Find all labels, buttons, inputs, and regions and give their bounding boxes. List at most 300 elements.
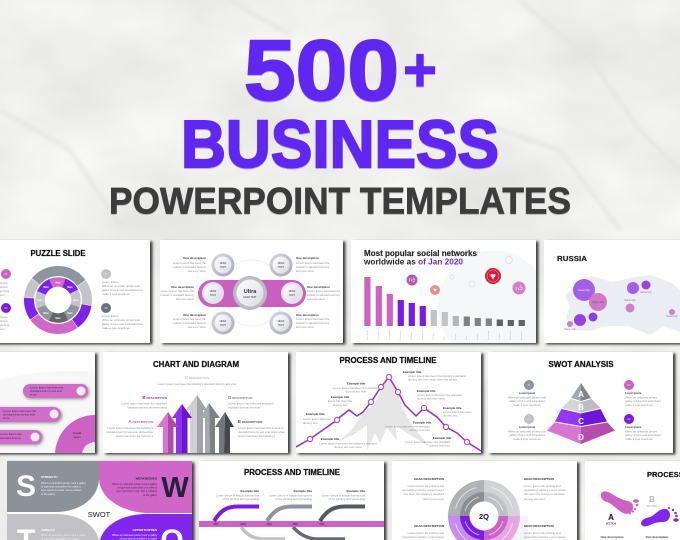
description E: Ipsum has been the industry's <box>238 434 276 438</box>
puzzle ring chart <box>24 266 92 334</box>
description top left: Lorem Ipsum the printing and <box>408 484 444 488</box>
description B: Lorem Ipsum has been the industry's <box>121 402 168 406</box>
mountain silhouette <box>337 377 430 450</box>
example labels <box>216 489 365 501</box>
head text circles: TEXT <box>210 295 217 297</box>
description E: E DESCRIPTION <box>238 419 262 424</box>
example labels: of the printing and typesetting <box>328 497 365 501</box>
description D: Lorem Ipsum has been the industry's <box>228 402 274 406</box>
left labels: text <box>0 327 5 331</box>
description D: D DESCRIPTION <box>228 395 253 400</box>
left items: 02 <box>528 417 531 421</box>
arrow C <box>186 395 207 453</box>
description C <box>158 376 236 386</box>
slide: SWOT analysis pyramid <box>488 352 673 453</box>
slide: pill callouts <box>0 352 100 456</box>
description texts: industry's standard dummy <box>161 293 195 297</box>
description labels: One description <box>601 535 624 539</box>
right items: 04 <box>628 417 631 421</box>
pale curve <box>0 371 95 453</box>
description texts: Lorem Ipsum has been the <box>161 289 194 293</box>
right labels: Lorem Ipsum <box>102 314 119 318</box>
arrow D <box>203 403 220 453</box>
timeline labels: Example title <box>443 406 462 410</box>
timeline labels: Example title <box>347 382 366 386</box>
right items: make a type specimen <box>625 437 653 441</box>
weaknesses text: When an unknown printer took a galley <box>112 482 158 486</box>
description texts: One description <box>307 285 330 289</box>
left items: Lorem Ipsum <box>519 391 536 395</box>
head text circles: HEAD <box>278 262 285 265</box>
timeline labels: Lorem Ipsum has been the standard <box>385 424 430 428</box>
left items: make a type specimen <box>513 403 541 407</box>
slide: social networks bar chart <box>351 240 536 343</box>
right items: When an unknown printer <box>625 430 657 434</box>
left items: Lorem Ipsum <box>519 425 536 429</box>
left labels: simply <box>0 319 9 323</box>
timeline labels: Example title <box>413 420 432 424</box>
description texts: industry's standard dummy <box>307 293 341 297</box>
description D: standard dummy text ever <box>228 406 260 410</box>
pale square <box>484 516 528 540</box>
bar labels: Facebook <box>367 329 369 340</box>
description bottom left: HEAD DESCRIPTION <box>414 524 444 528</box>
callout pill 3: Lorem Ipsum has <box>0 432 22 436</box>
right labels: 03 <box>105 272 108 276</box>
heading: POWERPOINT TEMPLATES: POWERPOINT TEMPLATES <box>109 180 571 222</box>
bubble labels: Name City <box>640 291 652 294</box>
timeline labels: dummy text ever since <box>334 445 362 449</box>
left labels: Ipsum <box>0 281 8 285</box>
opportunities text: OPPORTUNITIES <box>132 528 157 532</box>
description texts: text ever since <box>296 325 314 329</box>
strength text: to the galley <box>41 492 56 496</box>
timeline labels: dummy text ever <box>409 428 430 432</box>
left items: galley of type and scrambled <box>509 433 545 437</box>
icons: social reactions: ♥ <box>490 272 496 282</box>
letter W: W <box>161 472 189 504</box>
curve dark grey <box>293 527 345 539</box>
threats text: When an unknown printer took a galley <box>41 533 87 537</box>
description labels <box>601 535 669 539</box>
left labels: text <box>0 293 5 297</box>
head text circles: TEXT <box>220 267 227 269</box>
callout pill 2 <box>0 407 61 422</box>
timeline band: 2019 <box>266 524 272 526</box>
timeline labels: Lorem Ipsum has been <box>303 417 332 421</box>
head text circles: TEXT <box>289 295 296 297</box>
timeline band: 2021 <box>319 524 325 526</box>
description top right: dummy text ever <box>524 497 545 501</box>
description bottom right <box>524 524 566 539</box>
icon: purple footprint <box>641 507 679 526</box>
callout pill 3: standard dummy <box>0 436 21 440</box>
section A label <box>606 513 616 526</box>
description texts: Lorem Ipsum has been the <box>173 317 206 321</box>
strength text: STRENGTH <box>41 475 58 479</box>
head text circles: HEAD <box>220 262 227 265</box>
head text circles: TEXT <box>220 325 227 327</box>
left items: make a type specimen <box>513 437 541 441</box>
left labels: printing <box>0 323 10 327</box>
slide title: Most popular social networks <box>364 249 478 258</box>
head text circles: HEAD <box>289 290 296 293</box>
callout pill 3 <box>0 430 42 444</box>
centre circle: HEAD TEXT <box>243 296 257 299</box>
threats text: THREATS <box>41 528 55 532</box>
right labels: 04 <box>105 306 108 310</box>
description texts: One description <box>183 313 206 317</box>
puzzle ring chart: Main <box>67 313 73 315</box>
example labels: Lorem Ipsum is simply dummy text <box>269 494 312 498</box>
strength text: type specimen book. Not a problem <box>41 488 82 492</box>
left items: 01 <box>528 383 531 387</box>
timeline labels: Example title <box>306 412 325 416</box>
right labels: galley of type and scrambled it to <box>102 322 143 326</box>
timeline labels: dummy text ever <box>429 444 450 448</box>
quarter circle: Ipsum <box>73 435 81 439</box>
bubble labels: Name City <box>578 289 590 292</box>
callout pill 1 <box>23 384 88 398</box>
puzzle ring chart: Main <box>73 300 79 302</box>
description top left: HEAD DESCRIPTION <box>414 477 444 481</box>
slide: puzzle slide <box>0 240 150 343</box>
puzzle ring chart: Main <box>43 287 49 289</box>
description bottom left <box>402 524 445 539</box>
description texts: Lorem Ipsum has been the <box>307 289 341 293</box>
slide: process and timeline curves <box>199 461 384 540</box>
description top right: has been the industry's standard <box>524 492 565 496</box>
pyramid: B <box>578 403 584 412</box>
bar labels: WhatsApp <box>388 329 391 340</box>
head text circles: HEAD <box>210 290 217 293</box>
description E: standard dummy text ever since when <box>238 430 286 434</box>
description top left: dummy text ever <box>423 497 444 501</box>
strength text <box>41 475 87 496</box>
bubble labels: Name City <box>592 301 604 304</box>
description top right: Lorem Ipsum the printing and <box>524 484 561 488</box>
slide: SWOT colour quadrants <box>7 461 192 540</box>
left items: galley of type and scrambled <box>509 399 545 403</box>
slide: ultra head text diagram <box>160 240 343 343</box>
description texts: industry's standard dummy <box>173 321 207 325</box>
description top left: typesetting industry. Lorem Ipsum <box>402 488 445 492</box>
left labels: Ipsum <box>0 315 8 319</box>
head text circles: TEXT <box>278 267 285 269</box>
description A: Lorem Ipsum has been the industry's <box>107 426 154 430</box>
head text circles: HEAD <box>220 320 227 323</box>
icon: magenta footprint <box>601 491 639 514</box>
left items: When an unknown printer took <box>508 430 547 434</box>
right items: 03 <box>628 383 631 387</box>
left items <box>508 380 547 441</box>
description texts: industry's standard dummy <box>296 321 330 325</box>
description texts: One description <box>296 256 319 260</box>
bar labels: Instagram <box>421 330 424 340</box>
description texts: industry's standard dummy <box>296 265 330 269</box>
right labels: galley of type and scrambled it to <box>102 288 143 292</box>
description labels: Two description <box>646 535 669 539</box>
description B: standard dummy text ever since <box>127 406 167 410</box>
timeline labels: Lorem Ipsum has been <box>443 410 472 414</box>
example labels: Example title <box>346 489 365 493</box>
left labels: printing <box>0 289 10 293</box>
magenta pill <box>198 280 306 307</box>
timeline labels: Ipsum has been the <box>328 399 353 403</box>
description top right <box>524 477 566 501</box>
strength text: of type and scrambled it to make a <box>41 484 81 488</box>
strength text: When an unknown printer took a galley <box>41 481 87 485</box>
timeline labels: Lorem Ipsum has been the industry's standard <box>408 374 466 378</box>
bar labels: Facebook <box>400 329 402 340</box>
description texts <box>161 256 341 329</box>
description texts: text ever since <box>307 297 325 301</box>
timeline labels: dummy text ever <box>346 390 366 394</box>
timeline labels: Lorem Ipsum has been the standard <box>405 440 450 444</box>
timeline labels: Lorem Ipsum has been the industry's standard <box>319 442 377 446</box>
description texts: Lorem Ipsum has been the <box>296 317 330 321</box>
timeline band: 2020 <box>292 524 298 526</box>
bar labels: Pinterest <box>509 331 512 340</box>
section A label: SECTION <box>606 524 616 526</box>
slide subtitle: worldwide as of Jan 2020 <box>363 258 464 266</box>
circular quadrants: 2Q <box>479 512 489 521</box>
timeline labels: dummy text ever since when the printer <box>408 378 457 382</box>
bar labels: Twitter <box>498 333 501 340</box>
timeline labels: dummy text <box>443 414 458 418</box>
quarter circle: Lorem <box>73 431 82 435</box>
description top left <box>402 477 445 501</box>
centre circle <box>233 276 267 310</box>
threats text <box>41 528 87 540</box>
slide: Russia map <box>544 240 680 343</box>
timeline labels: Example title <box>321 437 340 441</box>
bar labels <box>367 329 523 340</box>
description texts: One description <box>183 256 206 260</box>
section B label: SECTION <box>647 506 657 508</box>
icons: social reactions: ♥ <box>433 288 437 294</box>
left labels: 01 <box>5 272 8 276</box>
timeline line <box>296 377 481 451</box>
puzzle ring chart: Main <box>43 313 49 315</box>
slide: process footprints <box>585 461 680 540</box>
curve light grey <box>241 527 285 539</box>
slide title: SWOT ANALYSIS <box>548 360 614 369</box>
quarter circle <box>55 415 95 453</box>
description A <box>106 419 154 438</box>
quadrant O <box>100 514 192 540</box>
description bottom right: Lorem Ipsum the printing and <box>524 531 561 535</box>
bar labels: Reddit <box>476 333 479 340</box>
description bottom left: typesetting industry. Lorem Ipsum <box>402 535 445 539</box>
description texts: Lorem Ipsum has been the <box>173 261 206 265</box>
bar labels: Snapchat <box>487 330 490 340</box>
timeline band: 2018 <box>240 524 246 526</box>
quadrant S <box>7 461 99 512</box>
slide: 2Q circular diagram <box>392 461 577 540</box>
right labels: When an unknown printer took <box>102 284 141 288</box>
bar labels: Sina <box>466 335 468 340</box>
left labels: 02 <box>5 306 8 310</box>
icons: social reactions: 👍︎ <box>515 286 523 292</box>
timeline labels: Example title <box>331 395 350 399</box>
pale background circle <box>437 250 536 343</box>
right items: Lorem Ipsum <box>625 425 642 429</box>
bar labels: TikTok <box>433 333 435 340</box>
description D <box>228 396 274 409</box>
timeline labels: Example title <box>403 370 422 374</box>
timeline labels: Lorem Ipsum has been the industry's <box>333 386 379 390</box>
timeline labels <box>303 370 472 449</box>
callout pill 2: Lorem Ipsum has been the <box>3 409 37 413</box>
slide title: CHART AND DIAGRAM <box>153 360 239 369</box>
arrow E <box>215 412 234 453</box>
right labels: Lorem Ipsum <box>102 280 119 284</box>
pyramid: C <box>578 417 584 426</box>
timeline markers <box>307 374 470 445</box>
puzzle ring chart: Main <box>37 300 43 302</box>
callout pill 1: standard dummy text ever <box>30 389 62 393</box>
timeline labels: dummy text ever since <box>417 396 445 400</box>
bar labels: Kuaishou <box>521 330 523 340</box>
weaknesses text: to the galley <box>143 493 158 497</box>
bar labels: YouTube <box>378 331 380 340</box>
left items: When an unknown printer took <box>508 396 547 400</box>
weaknesses text: type specimen book. Not a problem <box>116 489 157 493</box>
description bottom right: typesetting industry. Lorem Ipsum <box>524 535 566 539</box>
section B label <box>647 495 657 508</box>
bubble labels <box>564 289 678 331</box>
description bottom right: HEAD DESCRIPTION <box>524 524 554 528</box>
slide: chart and diagram <box>103 352 288 453</box>
slide: process and timeline mountain <box>296 352 481 453</box>
timeline labels: Example title <box>417 389 436 393</box>
section A label: A <box>608 513 614 522</box>
timeline band <box>199 521 384 527</box>
example labels: of the printing and typesetting <box>222 497 259 501</box>
description E <box>238 419 286 438</box>
description B: B DESCRIPTION <box>142 395 167 400</box>
description texts: text ever since <box>188 269 206 273</box>
slide title: PUZZLE SLIDE <box>30 249 86 258</box>
example labels: of the printing and typesetting <box>275 497 312 501</box>
bar chart <box>364 277 525 326</box>
heading: 500+: + <box>403 36 437 105</box>
opportunities text <box>112 528 158 540</box>
description A: A DESCRIPTION <box>128 419 153 424</box>
description A: standard dummy text ever since when <box>106 430 153 434</box>
description texts: text ever since <box>188 325 206 329</box>
timeline labels: Example title <box>433 436 452 440</box>
curve grey <box>267 506 312 521</box>
right items: galley of type and scrambled <box>625 433 661 437</box>
arrow B <box>172 404 192 453</box>
right labels <box>101 269 143 330</box>
slide title: PROCESS AND TIMELINE <box>340 356 437 365</box>
SWOT label: SWOT <box>88 510 111 519</box>
bar labels: WeChat <box>410 332 413 340</box>
head text circles: HEAD <box>278 320 285 323</box>
icons: social reactions <box>406 256 526 295</box>
description top left: has been the industry's standard <box>404 492 444 496</box>
description top right: typesetting industry. Lorem Ipsum <box>524 488 566 492</box>
left labels: simply <box>0 285 9 289</box>
section B label: B <box>649 495 655 504</box>
description A: Ipsum has been the industry's <box>116 434 154 438</box>
bubble labels: Name City <box>666 315 678 318</box>
timeline band: 2017 <box>213 524 219 526</box>
description texts: Lorem Ipsum has been the <box>296 261 330 265</box>
curve dark <box>320 506 365 521</box>
right items <box>624 380 661 441</box>
right labels: make a type specimen <box>102 292 130 296</box>
puzzle ring chart: Main <box>67 287 73 289</box>
right labels: When an unknown printer took <box>102 318 141 322</box>
description C: C DESCRIPTION <box>185 375 209 380</box>
example labels: Lorem Ipsum is simply dummy text <box>216 494 259 498</box>
head text circles: TEXT <box>278 325 285 327</box>
arrow A <box>157 412 178 453</box>
map shape <box>565 275 680 335</box>
heading: 500+: 500 <box>244 24 399 118</box>
quadrant T <box>7 514 99 540</box>
puzzle ring chart: Main <box>55 282 61 284</box>
example labels: Example title <box>293 489 312 493</box>
weaknesses text: of type and scrambled it to make a <box>117 486 158 490</box>
slide title: PROCESS AND TIMELINE <box>244 468 341 477</box>
description texts: text ever since <box>296 269 314 273</box>
description texts: industry's standard dummy <box>173 265 207 269</box>
bubble labels: Name City <box>564 328 576 331</box>
weaknesses text: WEAKNESSES <box>136 476 157 480</box>
description B <box>122 396 167 409</box>
pyramid: D <box>578 433 584 442</box>
description texts: text ever since <box>176 297 194 301</box>
description texts: One description <box>171 285 194 289</box>
curve purple <box>214 506 259 521</box>
timeline labels: dummy text <box>333 403 347 407</box>
head text circles <box>202 254 303 334</box>
weaknesses text <box>112 476 158 497</box>
right labels: make a type specimen <box>102 326 130 330</box>
connector ellipse <box>220 260 284 326</box>
bar labels: Qzone <box>455 333 457 340</box>
pyramid: A <box>578 390 584 399</box>
description texts: One description <box>296 313 319 317</box>
icons: social reactions: 👍︎ <box>409 278 416 284</box>
right items: Lorem Ipsum <box>625 391 642 395</box>
centre circle: Ultra <box>244 289 257 295</box>
description E: Lorem Ipsum has been the industry's <box>238 426 284 430</box>
pyramid <box>547 383 615 444</box>
callout pill 2: since <box>3 416 10 420</box>
opportunities text: When an unknown printer took a galley <box>112 533 158 537</box>
timeline labels: dummy text <box>303 421 318 425</box>
right items: When an unknown printer <box>625 396 657 400</box>
circular quadrants <box>448 480 520 540</box>
quadrant W <box>99 461 192 513</box>
example labels: Example title <box>240 489 259 493</box>
right items: make a type specimen <box>625 403 653 407</box>
map bubbles <box>567 279 675 327</box>
puzzle ring chart: Main <box>55 318 61 320</box>
bubble labels: Name City <box>624 299 636 302</box>
description bottom left: Lorem Ipsum the printing and <box>408 531 444 535</box>
callout pill 1: since <box>30 392 37 396</box>
letter S: S <box>16 470 36 503</box>
right items: galley of type and scrambled <box>625 399 661 403</box>
example labels: Lorem Ipsum is simply dummy text <box>322 494 365 498</box>
